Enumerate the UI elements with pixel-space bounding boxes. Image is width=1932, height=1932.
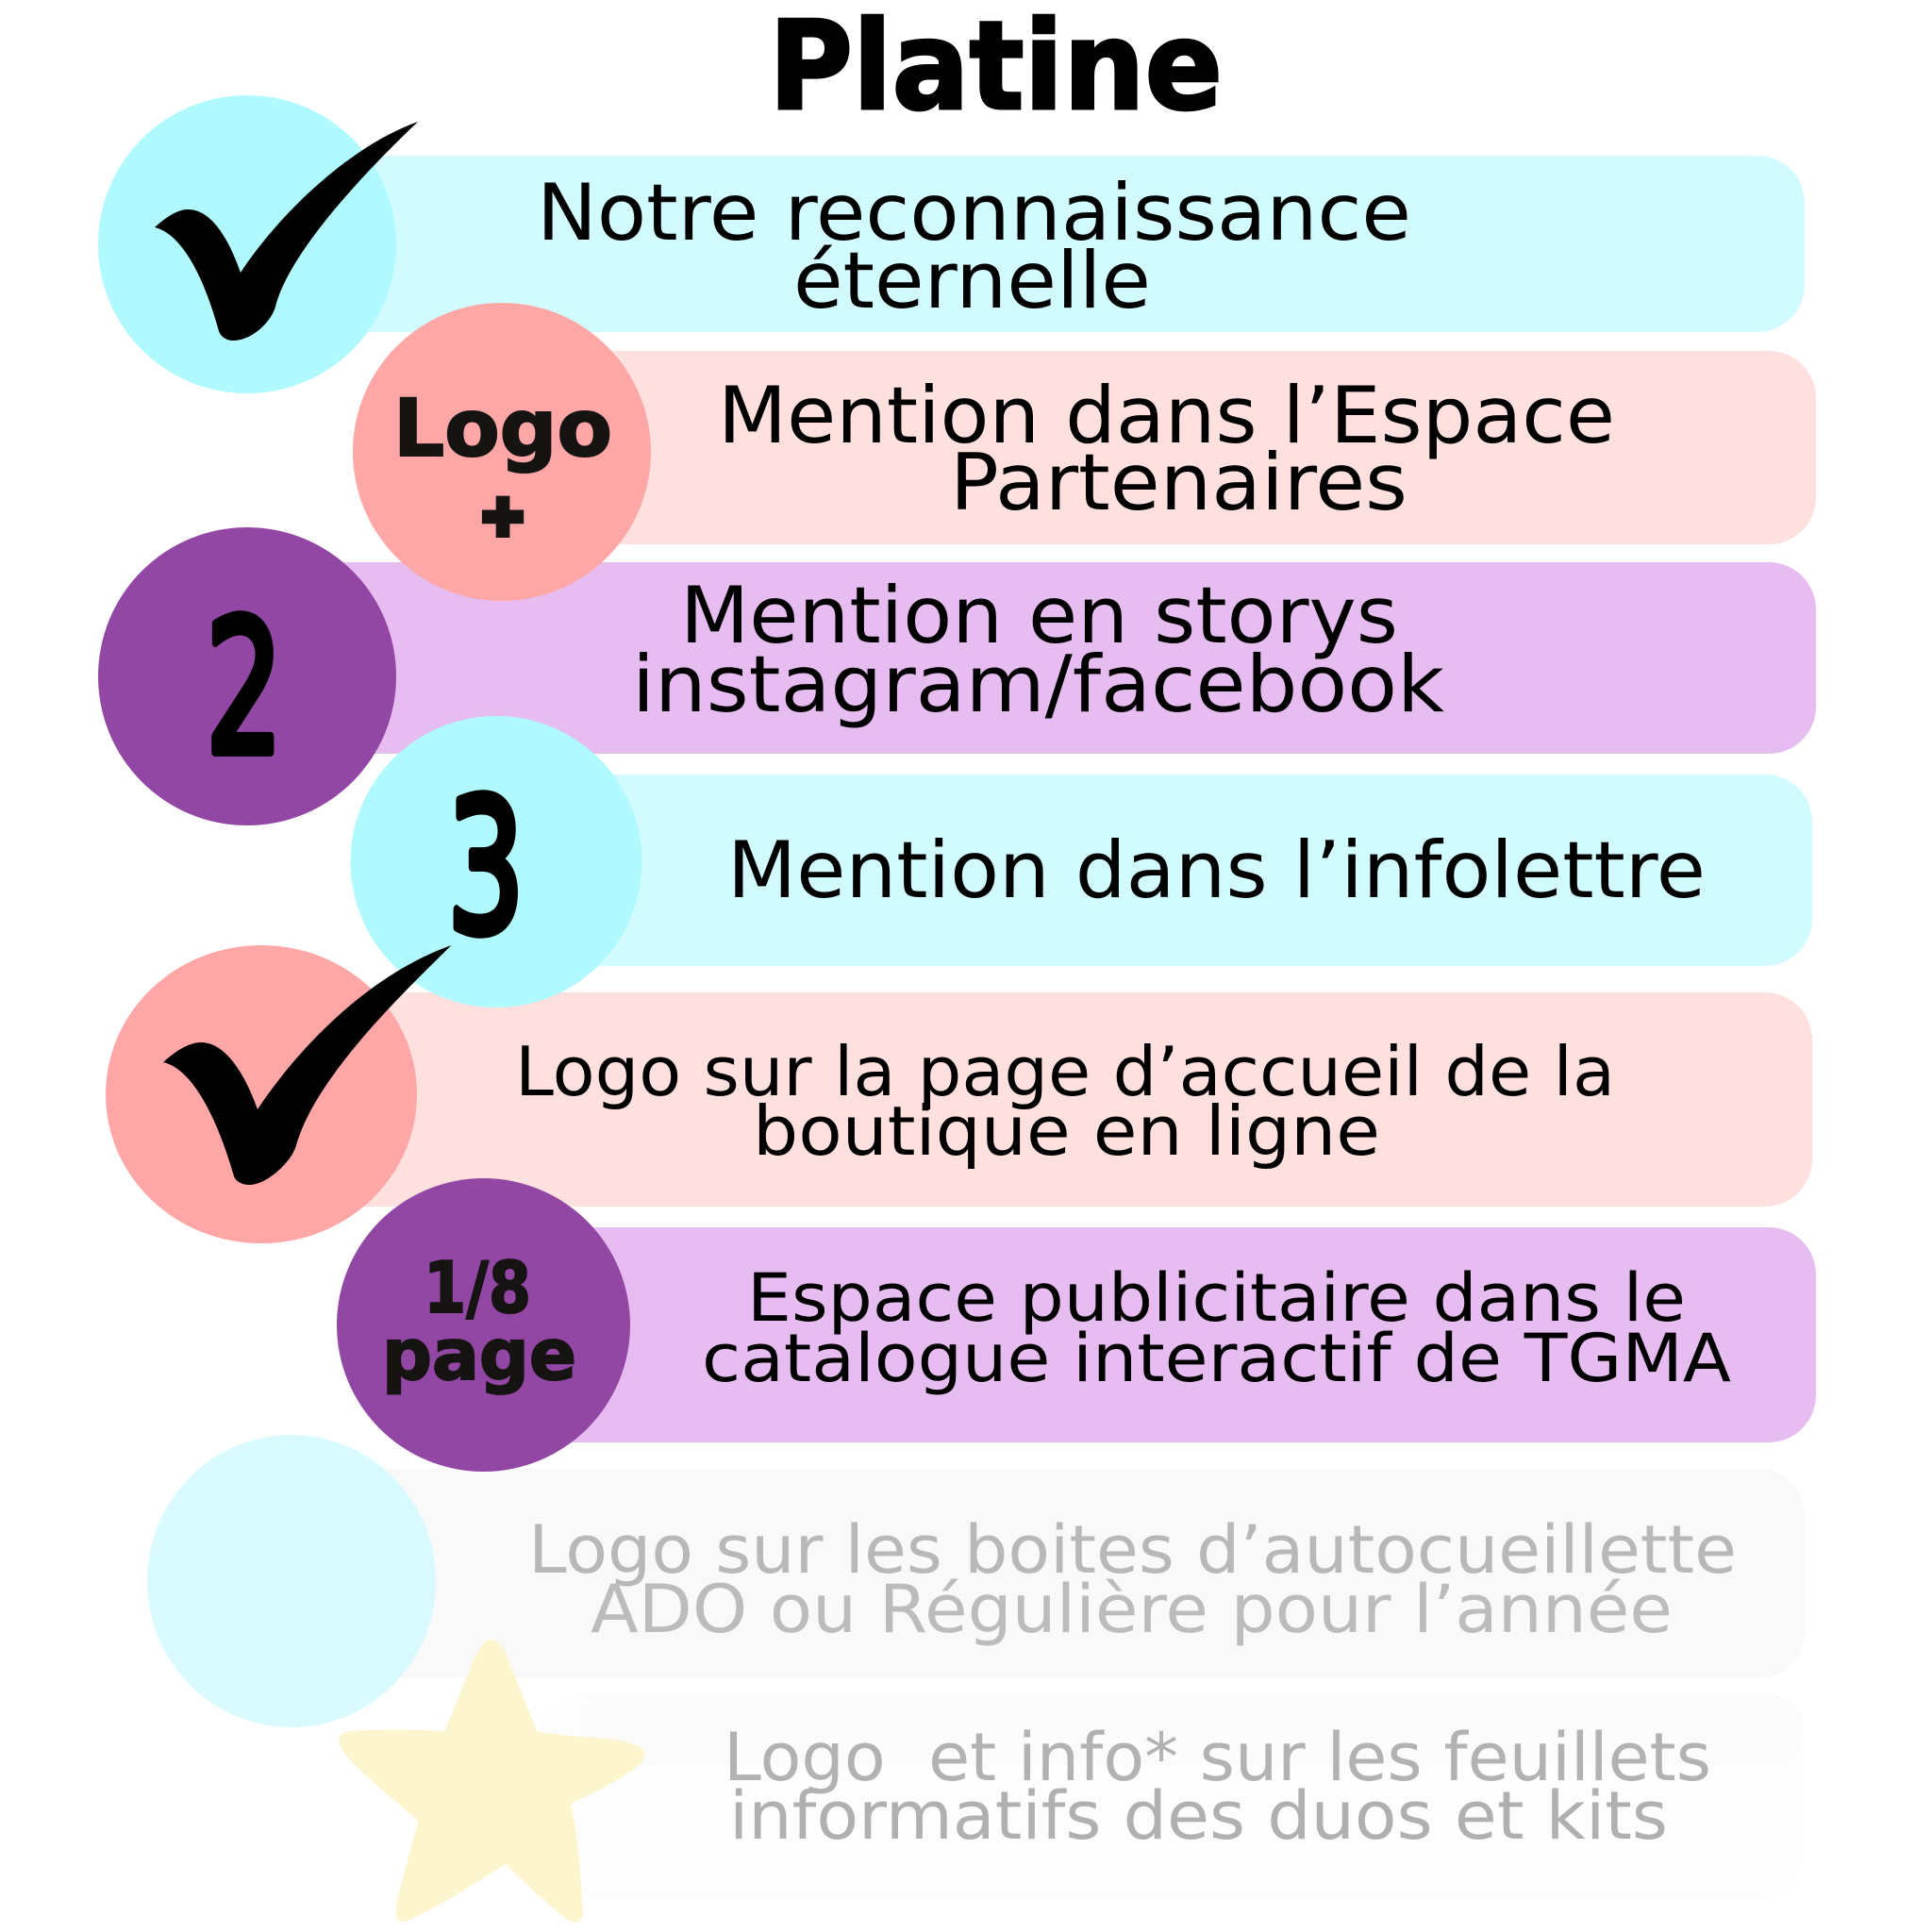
circle 3 [98, 527, 396, 825]
bar 5 [283, 992, 1812, 1207]
text block 1: Notre reconnaissance [537, 167, 1411, 258]
text block 5: Logo sur la page d’accueil de la [515, 1032, 1615, 1111]
number 2: 2 [206, 581, 283, 795]
bar 4 [472, 774, 1812, 966]
text block 5: boutique en ligne [753, 1091, 1380, 1171]
panel: Mention dans l'Espace Partenaires [353, 303, 1816, 601]
text block 1 [537, 167, 1411, 326]
bar 1 [283, 156, 1805, 332]
text block 3 [632, 570, 1444, 730]
text block 8: informatifs des duos et kits [729, 1777, 1668, 1855]
text block 2 [718, 370, 1615, 528]
panel: Espace publicitaire [337, 1178, 1816, 1472]
panel: Logo et info (faded) [339, 1640, 1805, 1922]
circle 2 [353, 303, 651, 601]
label: Logo +: Logo [393, 382, 612, 475]
label: Logo + [393, 382, 612, 547]
label: Logo +: + [480, 483, 525, 547]
panel: Logo sur les boites (faded) [147, 1435, 1805, 1727]
panel: Logo sur la page d'accueil [106, 945, 1812, 1243]
text block 3: instagram/facebook [632, 639, 1444, 730]
panel: Mention dans l'infolettre [351, 716, 1812, 1008]
text block 5 [515, 1032, 1615, 1171]
text block 2: Partenaires [950, 437, 1407, 528]
text block 4: Mention dans l’infolettre [727, 824, 1706, 916]
number 3: 3 [447, 760, 525, 974]
icon: star [339, 1640, 644, 1922]
text block 8: Logo et info* sur les feuillets [724, 1719, 1711, 1796]
panel: Notre reconnaissance éternelle [98, 95, 1805, 393]
text block 7: Logo sur les boites d’autocueillette [528, 1511, 1737, 1589]
text block 2: Mention dans l’Espace [718, 370, 1615, 461]
bar 7 [324, 1469, 1805, 1678]
circle 7 [147, 1435, 436, 1727]
text block 6: Espace publicitaire dans le [747, 1259, 1686, 1337]
label: 1/8 page: 1/8 [424, 1246, 531, 1329]
bar 8 [536, 1695, 1805, 1898]
circle 1 [98, 95, 396, 393]
text block 6 [702, 1259, 1731, 1397]
text block 8 [724, 1719, 1711, 1855]
bar 3 [283, 562, 1816, 754]
text block 7 [528, 1511, 1737, 1648]
circle 5 [106, 945, 417, 1243]
bar 6 [519, 1227, 1816, 1442]
circle 6 [337, 1178, 630, 1472]
text block 1: éternelle [793, 235, 1151, 326]
panel: Mention en storys [98, 527, 1816, 825]
icon: check mark 2 [163, 945, 451, 1185]
text block 3: Mention en storys [680, 570, 1398, 661]
bar 2 [528, 351, 1816, 544]
text block 6: catalogue interactif de TGMA [702, 1320, 1731, 1397]
text block 7: ADO ou Régulière pour l’année [591, 1571, 1673, 1648]
label: 1/8 page [382, 1246, 576, 1396]
circle 4 [351, 716, 641, 1008]
icon: check mark 1 [155, 122, 418, 341]
label: 1/8 page: page [382, 1313, 576, 1396]
